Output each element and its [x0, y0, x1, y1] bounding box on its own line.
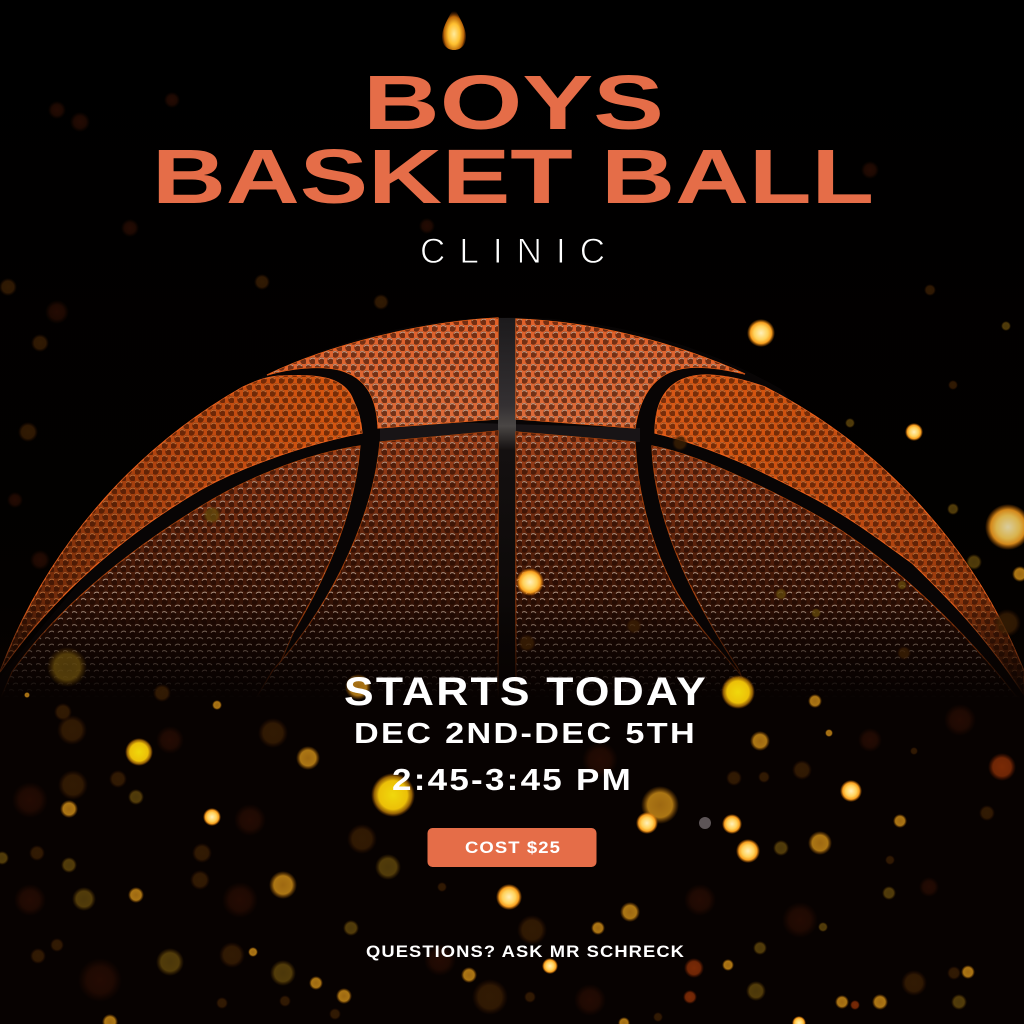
pebble texture, side panels	[0, 375, 1024, 695]
title line: boys: BOYS	[363, 60, 664, 146]
cost badge: COST $25	[465, 838, 561, 857]
icon: flame-shaped light	[442, 8, 466, 50]
start heading: STARTS TODAY	[344, 670, 708, 714]
basketball	[0, 317, 1024, 725]
upper centre panels	[267, 318, 745, 428]
subtitle: CLINIC	[420, 232, 618, 271]
title line: basket ball: BASKET BALL	[152, 134, 874, 220]
time: 2:45-3:45 PM	[392, 762, 633, 797]
lower dark area	[0, 698, 1024, 1024]
ball bottom fade	[0, 600, 1024, 725]
upper side panels	[0, 375, 1024, 695]
pebble texture, centre panels	[0, 318, 1024, 700]
dates: DEC 2ND-DEC 5TH	[354, 718, 697, 750]
lower panels	[0, 431, 1024, 700]
seams	[0, 317, 1024, 720]
cost badge	[428, 828, 596, 867]
contact line: QUESTIONS? ASK MR SCHRECK	[366, 942, 685, 961]
